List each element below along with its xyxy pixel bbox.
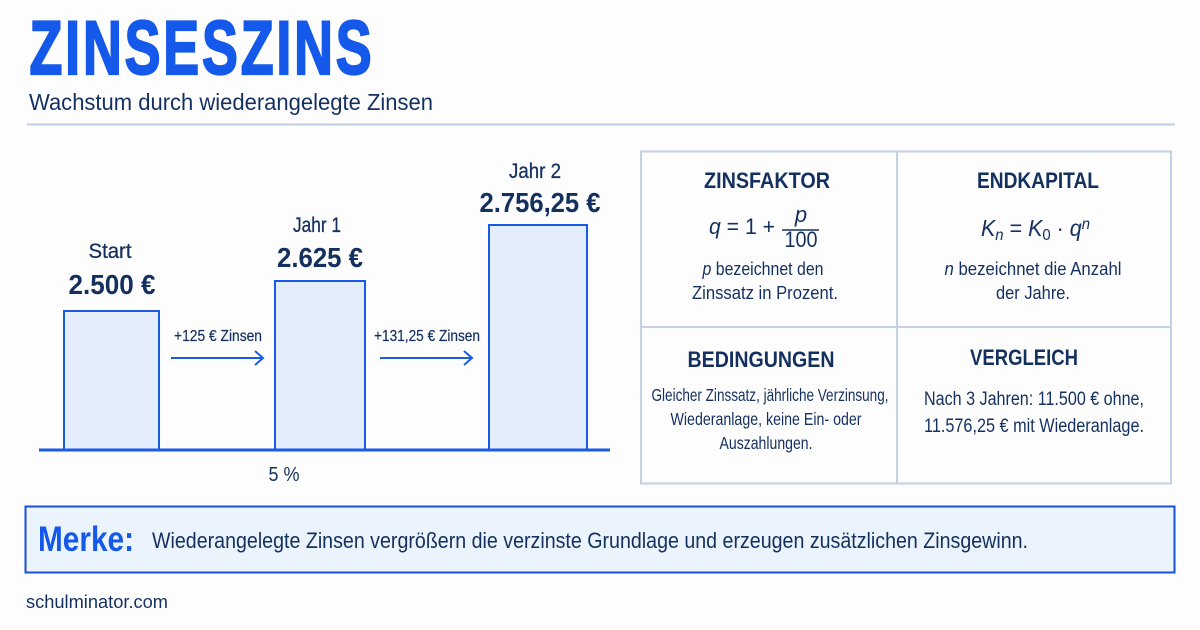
bar: Start (64, 240, 159, 450)
bar: Jahr 1 (275, 214, 365, 450)
panel: Vergleich: Nach 3 Jahren: 11.500 € ohne, (924, 389, 1144, 410)
panel: Vergleich: VERGLEICH (970, 345, 1078, 370)
panel: Endkapital: · (1051, 215, 1070, 241)
bar: Jahr 2: 2.756,25 € (480, 187, 601, 218)
panel: Zinsfaktor: Zinssatz in Prozent. (692, 282, 838, 303)
panel: Endkapital: der Jahre. (996, 282, 1070, 303)
panel: Zinsfaktor (692, 168, 838, 303)
panel: Endkapital: K (1028, 215, 1044, 241)
panel: Bedingungen: BEDINGUNGEN (688, 347, 834, 372)
panel: Zinsfaktor: 100 (784, 227, 818, 252)
arrow: +131,25 € Zinsen: +131,25 € Zinsen (374, 328, 480, 345)
title: ZINSESZINS (30, 6, 374, 91)
callout: Merke (26, 506, 1174, 572)
subtitle: Wachstum durch wiederangelegte Zinsen (29, 89, 433, 115)
panel: Endkapital: n (995, 227, 1004, 244)
panel: Bedingungen: Auszahlungen. (720, 433, 812, 453)
bar: Start: Start (88, 240, 132, 263)
panel: Endkapital: ENDKAPITAL (977, 168, 1099, 193)
bar: Jahr 2 (480, 160, 601, 450)
bar: Jahr 1: 2.625 € (277, 242, 363, 273)
panel: Endkapital: n bezeichnet die Anzahl (944, 258, 1122, 279)
panel: Vergleich (924, 345, 1144, 437)
bar: Jahr 1: Jahr 1 (293, 214, 341, 237)
callout: Merke: Merke: (38, 520, 134, 559)
footer: schulminator.com (26, 592, 168, 612)
rate label: 5 % (268, 464, 300, 486)
panel: Vergleich: 11.576,25 € mit Wiederanlage. (924, 416, 1144, 437)
arrow: +131,25 € Zinsen (374, 328, 480, 365)
bar: Jahr 2: Jahr 2 (509, 160, 561, 183)
panel: Endkapital (944, 168, 1122, 303)
panel: Zinsfaktor: ZINSFAKTOR (704, 168, 830, 193)
panel: Zinsfaktor: p (794, 202, 807, 227)
panel: Zinsfaktor: p bezeichnet den (702, 258, 824, 279)
arrow: +125 € Zinsen: +125 € Zinsen (174, 328, 262, 345)
panel: Endkapital: n (1082, 216, 1090, 233)
panel: Bedingungen (652, 347, 888, 453)
panel: Bedingungen: Gleicher Zinssatz, jährliche Verzinsung, (652, 385, 888, 405)
bar: Start: 2.500 € (68, 269, 156, 300)
arrow: +125 € Zinsen (171, 328, 263, 365)
panel: Endkapital: 0 (1042, 227, 1051, 244)
panel: Zinsfaktor: q = 1 + (709, 214, 775, 239)
panel: Endkapital: q (1070, 215, 1082, 241)
panel: formula grid (641, 151, 1171, 484)
panel: Bedingungen: Wiederanlage, keine Ein- oder (670, 409, 862, 429)
bar chart (39, 160, 610, 486)
panel: Endkapital: K (981, 215, 997, 241)
panel: Endkapital: = (1004, 215, 1028, 241)
callout: Merke: Wiederangelegte Zinsen vergrößern die verzinste Grundlage und erzeugen zusätzlichen Zinsgewinn. (152, 528, 1028, 553)
